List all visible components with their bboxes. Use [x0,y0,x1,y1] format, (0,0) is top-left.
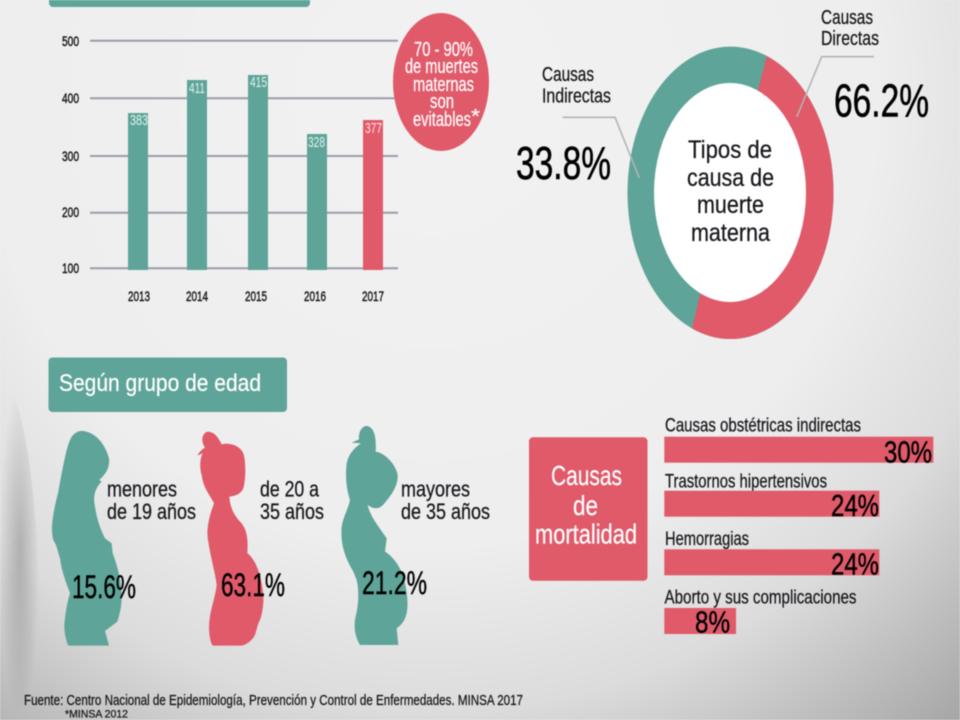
bar: indirect obstetric causes: Causas obstétricas indirectas [665,416,861,436]
bar chart: deaths per year: 300 [62,148,79,164]
bar chart: deaths per year: 2016 [304,288,326,304]
age group: over 35: mayores [401,476,470,502]
bar: indirect obstetric causes: 30% [884,434,932,470]
bar chart: deaths per year: 2017 [362,288,384,304]
callout: preventable deaths: maternas [413,74,474,96]
age group: over 35 [341,426,490,645]
icon: pregnant silhouette with long hair [52,431,122,646]
callout: preventable deaths: de muertes [405,56,478,78]
source note [24,692,523,720]
panel: causes of mortality heading [529,437,648,581]
bar: abortion and complications [664,587,856,640]
bar: hypertensive disorders [664,471,879,523]
top heading bar [49,0,310,7]
bar chart: deaths per year: 200 [62,204,79,220]
age group: under 19: de 19 años [107,499,196,524]
panel: causes of mortality heading: de [573,490,598,521]
icon: pregnant silhouette with hair bun, red [197,432,263,646]
bar: hemorrhages: 24% [831,546,879,582]
bar chart: deaths per year: 400 [62,90,79,106]
source note: Fuente: Centro Nacional de Epidemiología, Prevención y Control de Enfermedades. MINSA 2017 [24,692,523,709]
bar chart: deaths per year: 2014 [186,288,208,304]
label: indirect causes [516,64,639,189]
bar chart: deaths per year: 328 [308,134,325,151]
donut chart: types of cause: causa de [687,164,774,192]
donut chart: types of cause: muerte [697,191,764,219]
age group: over 35: 21.2% [362,565,427,601]
panel: causes of mortality heading: Causas [551,460,622,491]
bar: hypertensive disorders: Trastornos hipertensivos [665,471,827,492]
bar: abortion and complications: Aborto y sus complicaciones [664,587,856,608]
bar chart: deaths per year [62,33,398,304]
bar chart: deaths per year: 411 [189,80,205,97]
bar chart: deaths per year: 415 [250,74,267,91]
heading: age group [48,358,287,412]
callout: preventable deaths: 70 - 90% [414,39,473,61]
bar: indirect obstetric causes [664,416,933,470]
bar chart: deaths per year: 383 [130,112,148,129]
label: direct causes: Causas [821,7,873,29]
callout: preventable deaths: * [471,106,480,128]
callout: preventable deaths: evitables [413,109,471,131]
label: direct causes [797,7,929,126]
age group: 20 to 35 [197,432,324,646]
callout: preventable deaths: son [430,91,454,113]
bar: abortion and complications: 8% [695,605,730,640]
panel: causes of mortality heading: mortalidad [535,518,637,550]
donut chart: types of cause [628,47,834,339]
bar chart: deaths per year: 500 [62,33,79,49]
icon: pregnant silhouette with top bun [341,426,407,645]
bar: hemorrhages [664,529,879,582]
age group: 20 to 35: 63.1% [221,567,285,603]
age group: under 19 [52,431,196,646]
age group: 20 to 35: 35 años [260,499,324,524]
label: indirect causes: Indirectas [542,86,611,108]
label: direct causes: Directas [821,28,879,50]
bar chart: deaths per year: 2013 [128,288,150,304]
age group: over 35: de 35 años [401,499,490,524]
bar chart: deaths per year: 377 [365,120,382,137]
callout: preventable deaths [393,13,489,151]
donut chart: types of cause: materna [691,219,770,247]
heading: age group: Según grupo de edad [59,370,261,397]
bar chart: deaths per year: 2015 [245,288,267,304]
bar: hemorrhages: Hemorragias [665,529,749,550]
age group: 20 to 35: de 20 a [260,476,320,502]
bar chart: deaths per year: 100 [62,260,79,276]
label: indirect causes: 33.8% [516,137,611,189]
age group: under 19: 15.6% [72,569,136,605]
label: indirect causes: Causas [542,64,594,86]
donut chart: types of cause: Tipos de [688,136,772,164]
age group: under 19: menores [107,476,177,502]
bar: hypertensive disorders: 24% [831,488,879,523]
